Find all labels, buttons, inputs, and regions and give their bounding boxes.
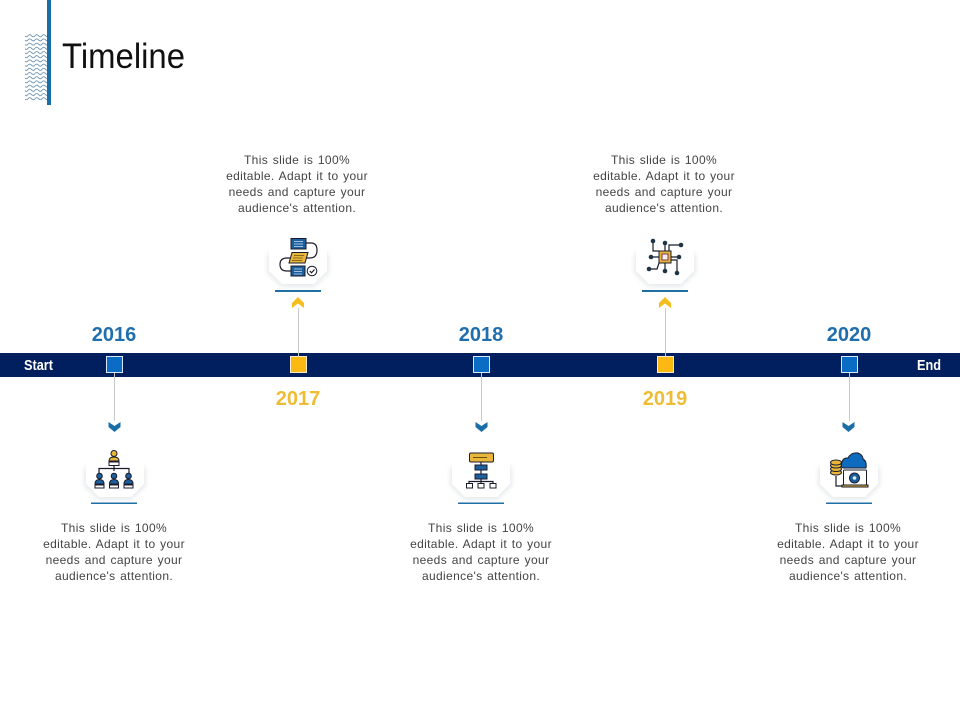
icon: flowchart hierarchy bbox=[466, 453, 496, 488]
milestone 2016 bbox=[43, 324, 185, 583]
timeline bar bbox=[0, 353, 960, 377]
connector and chevron 2019 bbox=[659, 297, 671, 356]
title: Timeline bbox=[62, 37, 185, 76]
icon tile 2019 bbox=[634, 231, 696, 292]
description 2016 bbox=[43, 521, 185, 583]
description 2018: This slide is 100% bbox=[428, 521, 534, 535]
description 2019 bbox=[593, 153, 735, 215]
description 2019: audience's attention. bbox=[605, 201, 723, 215]
description 2016: needs and capture your bbox=[46, 553, 182, 567]
description 2017: This slide is 100% bbox=[244, 153, 350, 167]
connector and chevron 2017 bbox=[292, 297, 304, 356]
icon: workflow documents bbox=[280, 238, 317, 276]
marker 2017 bbox=[290, 356, 306, 372]
description 2016: audience's attention. bbox=[55, 569, 173, 583]
year 2018: 2018 bbox=[459, 324, 503, 346]
description 2017: audience's attention. bbox=[238, 201, 356, 215]
connector and chevron 2020 bbox=[842, 373, 854, 432]
description 2020: audience's attention. bbox=[789, 569, 907, 583]
description 2017 bbox=[226, 153, 368, 215]
marker 2020 bbox=[842, 356, 858, 372]
description 2018 bbox=[410, 521, 552, 583]
header accent: wave pattern and vertical bar bbox=[25, 0, 51, 105]
description 2019: This slide is 100% bbox=[611, 153, 717, 167]
description 2016: This slide is 100% bbox=[61, 521, 167, 535]
description 2017: needs and capture your bbox=[229, 185, 365, 199]
icon tile 2016 bbox=[84, 444, 146, 504]
milestone 2017 bbox=[226, 153, 368, 410]
marker 2016 bbox=[106, 356, 122, 372]
start label: Start bbox=[24, 357, 53, 374]
icon tile 2018 bbox=[450, 444, 512, 504]
icon tile 2020 bbox=[818, 444, 880, 504]
year 2016: 2016 bbox=[92, 324, 136, 346]
icon: org chart bbox=[95, 450, 133, 488]
year 2017: 2017 bbox=[276, 388, 320, 410]
description 2018: needs and capture your bbox=[413, 553, 549, 567]
connector and chevron 2018 bbox=[476, 373, 488, 432]
marker 2019 bbox=[658, 356, 674, 372]
icon tile 2017 bbox=[267, 231, 329, 292]
icon: cloud data laptop bbox=[830, 453, 868, 487]
description 2020: editable. Adapt it to your bbox=[777, 537, 919, 551]
description 2020: This slide is 100% bbox=[795, 521, 901, 535]
milestone 2018 bbox=[410, 324, 552, 583]
description 2020: needs and capture your bbox=[780, 553, 916, 567]
milestone 2019 bbox=[593, 153, 735, 410]
description 2019: editable. Adapt it to your bbox=[593, 169, 735, 183]
connector and chevron 2016 bbox=[108, 373, 120, 432]
year 2019: 2019 bbox=[643, 388, 687, 410]
icon: circuit chip bbox=[647, 239, 683, 275]
description 2019: needs and capture your bbox=[596, 185, 732, 199]
description 2017: editable. Adapt it to your bbox=[226, 169, 368, 183]
description 2020 bbox=[777, 521, 919, 583]
milestone 2020 bbox=[777, 324, 919, 583]
marker 2018 bbox=[474, 356, 490, 372]
end label: End bbox=[917, 357, 941, 374]
description 2018: audience's attention. bbox=[422, 569, 540, 583]
year 2020: 2020 bbox=[827, 324, 871, 346]
description 2016: editable. Adapt it to your bbox=[43, 537, 185, 551]
description 2018: editable. Adapt it to your bbox=[410, 537, 552, 551]
